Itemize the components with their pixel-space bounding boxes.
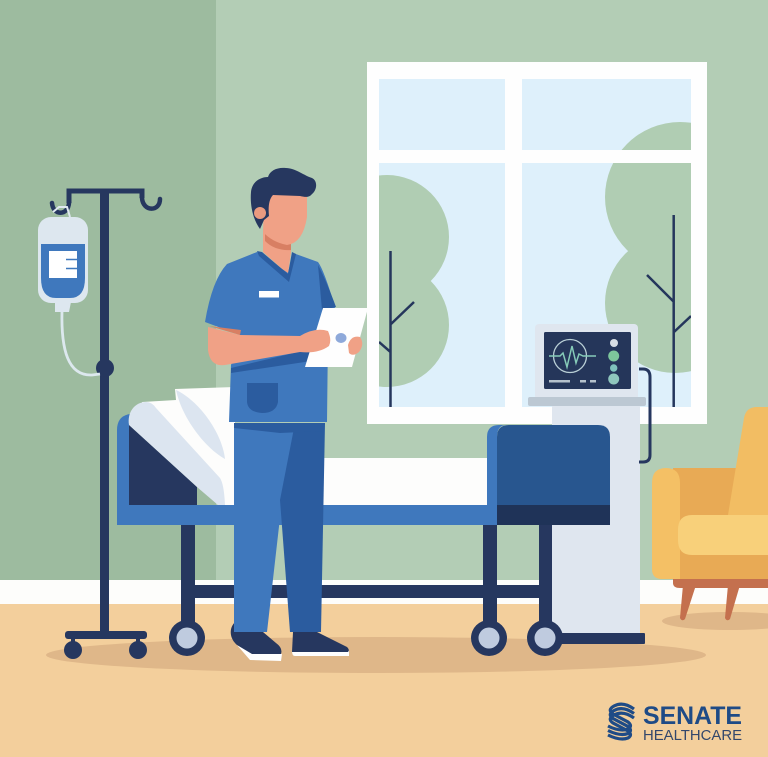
- IV stand: [52, 190, 160, 659]
- bed mattress: [322, 458, 492, 505]
- logo: Senate Healthcare: [608, 702, 742, 744]
- pillow: [142, 387, 235, 505]
- nurse shoes: [231, 622, 349, 661]
- window: [367, 62, 707, 424]
- logo wordmark: SENATE: [643, 702, 742, 730]
- bed dark panel: [129, 425, 197, 505]
- nurse trousers: [234, 423, 325, 632]
- hospital bed: [117, 387, 552, 625]
- tablet: [305, 308, 368, 367]
- floor shadow: [46, 637, 706, 673]
- medical monitor machine: [528, 324, 650, 644]
- armchair: [652, 407, 768, 630]
- trees outside window: [379, 122, 691, 407]
- bed wheels: [169, 620, 563, 656]
- logo S mark: [608, 704, 634, 739]
- monitor screen: [544, 332, 631, 389]
- nurse scrub top: [205, 251, 336, 422]
- logo subtitle: HEALTHCARE: [643, 728, 742, 744]
- scrub pocket: [247, 383, 278, 413]
- nurse arm: [208, 326, 330, 365]
- IV fluid bag: [38, 207, 100, 375]
- nurse head: [251, 168, 316, 274]
- bed footboard: [487, 425, 610, 525]
- nurse: [205, 168, 368, 661]
- bed legs and bar: [181, 525, 552, 625]
- bed headboard and frame: [117, 414, 497, 525]
